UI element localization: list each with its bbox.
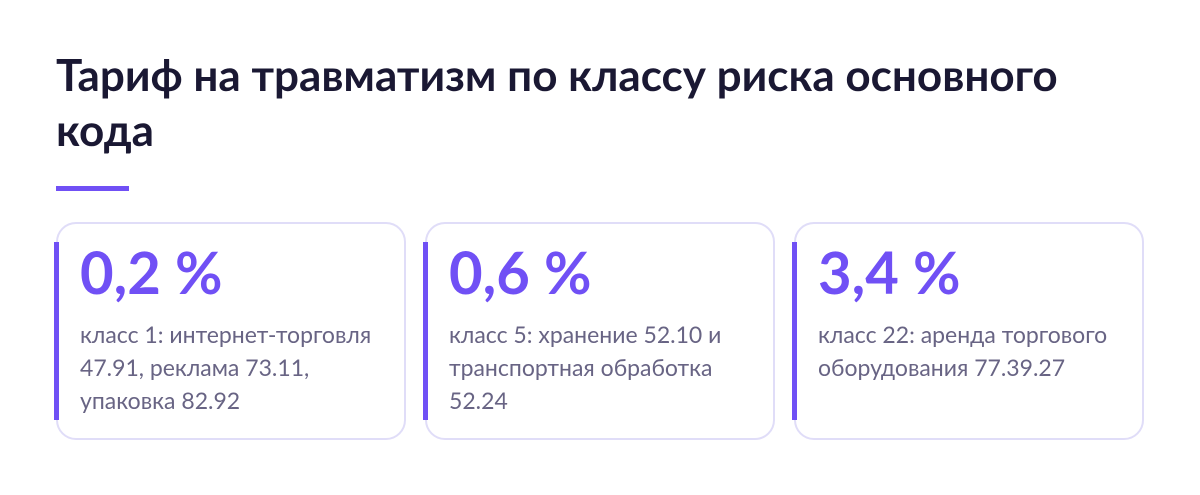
rate value: 0,2 % (80, 238, 222, 307)
description: класс 1: интернет-торговля (80, 320, 371, 348)
accent bar (792, 242, 797, 420)
title: кода (56, 104, 154, 156)
panel: class 5 (425, 222, 775, 440)
description: класс 5: хранение 52.10 и (449, 320, 721, 348)
description: упаковка 82.92 (80, 386, 240, 414)
accent bar (54, 242, 59, 420)
description: оборудования 77.39.27 (818, 353, 1065, 381)
accent bar (423, 242, 428, 420)
rate value: 3,4 % (818, 238, 960, 307)
description (449, 320, 721, 414)
description: транспортная обработка (449, 353, 712, 381)
description (80, 320, 371, 414)
description: 47.91, реклама 73.11, (80, 353, 309, 381)
description: класс 22: аренда торгового (818, 320, 1107, 348)
description: 52.24 (449, 386, 508, 414)
title (56, 49, 1058, 156)
panel: class 22 (794, 222, 1144, 440)
title underline accent (56, 186, 129, 191)
rate value: 0,6 % (449, 238, 591, 307)
title: Тариф на травматизм по классу риска основного (56, 49, 1058, 101)
panel: class 1 (56, 222, 406, 440)
description (818, 320, 1107, 381)
